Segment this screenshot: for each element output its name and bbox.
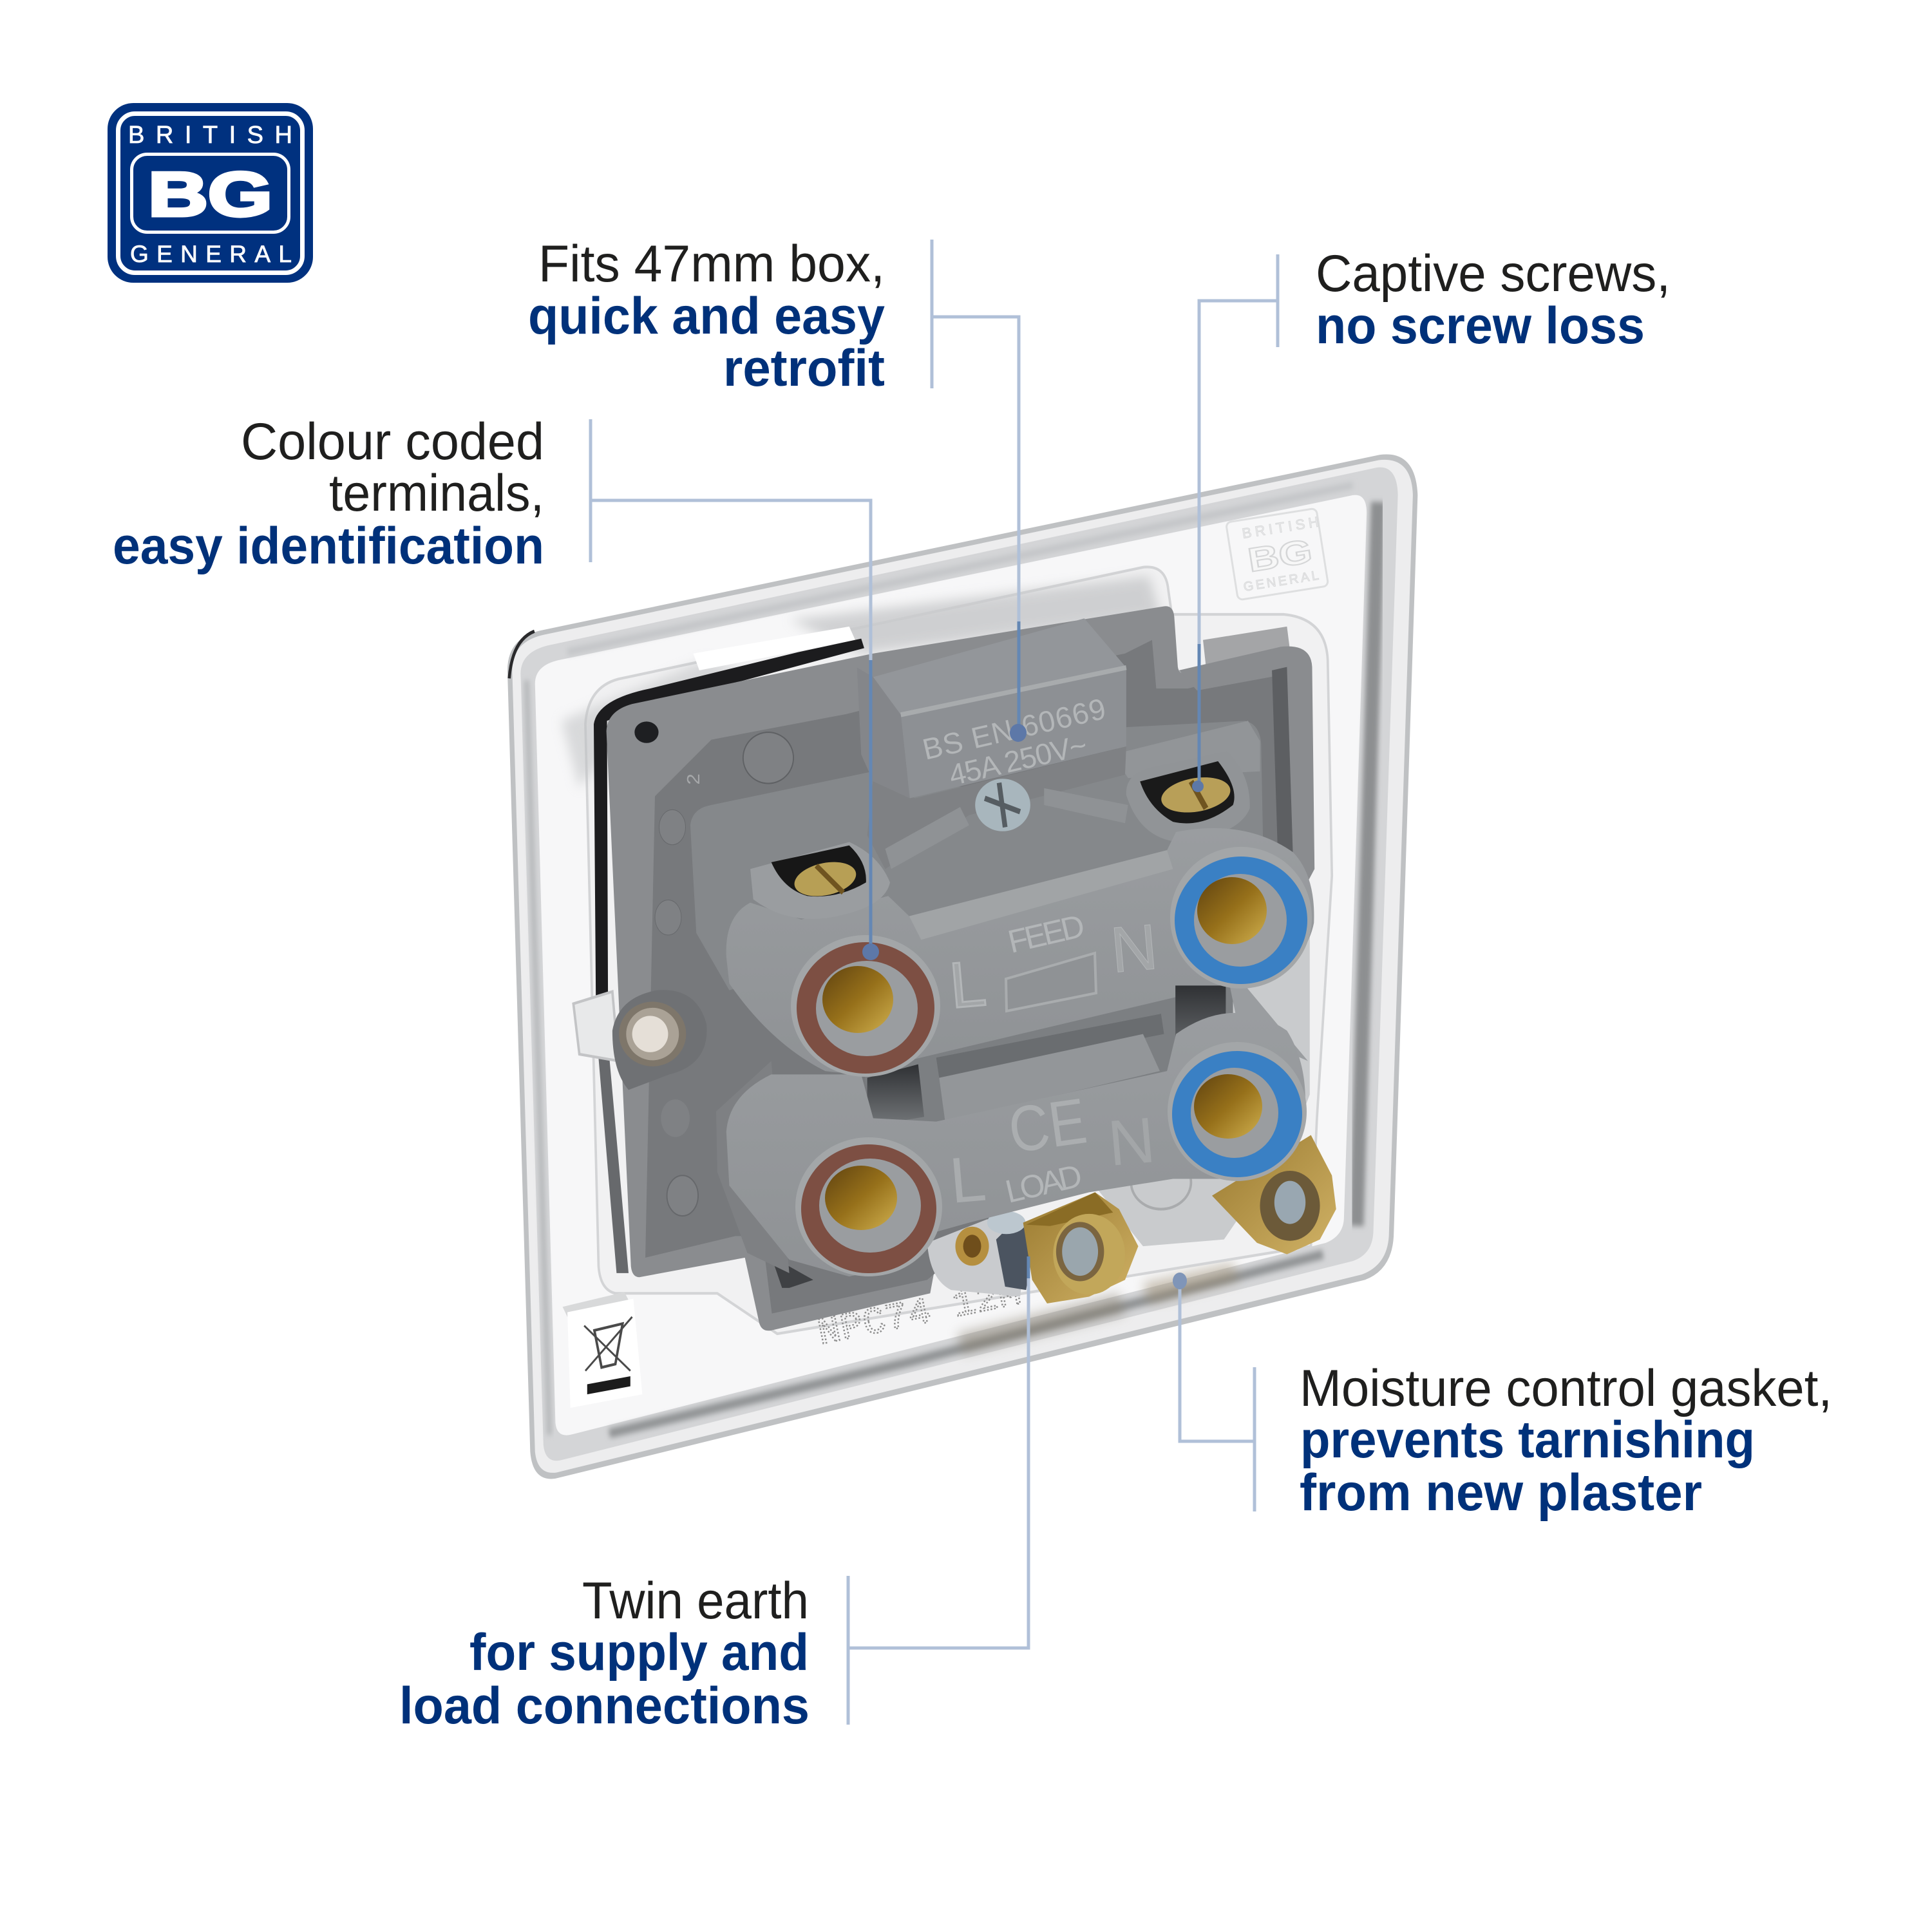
logo: British General: BRITISH — [128, 122, 292, 149]
rear housing tier — [690, 721, 1263, 1273]
housing: centre recess — [864, 983, 1308, 1132]
backplate: grey flange with recess: 2 — [683, 773, 703, 785]
logo: British General: BG — [148, 159, 272, 229]
callout: colour coded terminals — [113, 413, 544, 575]
embossed markings: L — [947, 1142, 989, 1217]
stamp: moulded BG logo on plate: GENERAL — [1242, 569, 1320, 594]
stamp: moulded BG logo on plate: BRITISH — [1241, 513, 1320, 542]
screw recess: top right — [1126, 751, 1250, 842]
embossed markings: L — [947, 947, 989, 1022]
callout: twin earth: Twin earth — [582, 1572, 809, 1630]
callout: colour coded terminals: terminals, — [329, 464, 544, 522]
fuse block: BS EN 60669: BS EN 60669 — [920, 692, 1109, 766]
callout: moisture control gasket: prevents tarnishing — [1300, 1411, 1755, 1469]
sticker: WEEE recycling label — [563, 1292, 642, 1408]
embossed markings: FEED — [1005, 907, 1088, 960]
logo: British General — [108, 103, 313, 283]
logo: British General: GENERAL — [130, 241, 292, 267]
leader: fits 47mm box — [932, 240, 1027, 742]
callout: captive screws — [1316, 245, 1671, 355]
housing: load terminal tier — [726, 1013, 1305, 1276]
gasket: clear moisture seal — [562, 567, 1332, 1334]
product: switch rear view — [507, 454, 1417, 1479]
fuse block: BS EN 60669 — [857, 618, 1126, 799]
embossed markings — [947, 907, 1160, 1217]
stamp: moulded BG logo on plate: BG — [1245, 533, 1315, 580]
lug: fixing eyelet — [612, 990, 707, 1090]
embossed markings: N — [1105, 1104, 1158, 1180]
embossed markings: CE — [1004, 1084, 1091, 1167]
callout: fits 47mm box: Fits 47mm box, — [538, 235, 885, 293]
leader: captive screws — [1192, 254, 1278, 792]
embossed markings: LOAD — [1002, 1157, 1085, 1210]
stamp: moulded BG logo on plate — [1226, 508, 1329, 600]
callout: twin earth: load connections — [399, 1677, 810, 1735]
callout: fits 47mm box: retrofit — [723, 339, 885, 397]
leader: moisture control gasket — [1173, 1273, 1255, 1511]
fuse block: BS EN 60669: 45A 250V~ — [946, 728, 1090, 792]
callout: captive screws: Captive screws, — [1316, 245, 1671, 303]
callout: captive screws: no screw loss — [1316, 297, 1645, 355]
callout: fits 47mm box: quick and easy — [528, 287, 885, 345]
callout: fits 47mm box — [528, 235, 885, 397]
terminal: live feed, brown ring — [791, 935, 940, 1077]
leader: colour coded terminals — [591, 419, 879, 960]
screw: centre fixing — [975, 779, 1030, 831]
callout: moisture control gasket: from new plaster — [1300, 1464, 1702, 1522]
callout: moisture control gasket — [1300, 1359, 1832, 1522]
callout: colour coded terminals: Colour coded — [241, 413, 544, 471]
terminal: neutral load, blue ring — [1168, 1042, 1307, 1181]
backplate: grey flange with recess — [607, 606, 1314, 1331]
plate: brushed metal frame — [507, 454, 1417, 1479]
terminal: live load, brown ring — [795, 1137, 942, 1276]
callout: twin earth: for supply and — [469, 1624, 809, 1681]
embossed markings: N — [1108, 911, 1160, 987]
terminal: neutral feed, blue ring — [1170, 847, 1312, 989]
callout: moisture control gasket: Moisture control gasket, — [1300, 1359, 1832, 1417]
callout: colour coded terminals: easy identification — [113, 517, 544, 575]
stamp: batch code: NPC74 12M — [815, 1273, 1025, 1356]
leader: twin earth — [848, 1256, 1028, 1725]
brass earth terminals and silver plate — [927, 933, 1336, 1303]
callout: twin earth — [399, 1572, 810, 1735]
housing: feed terminal tier — [726, 828, 1314, 1073]
